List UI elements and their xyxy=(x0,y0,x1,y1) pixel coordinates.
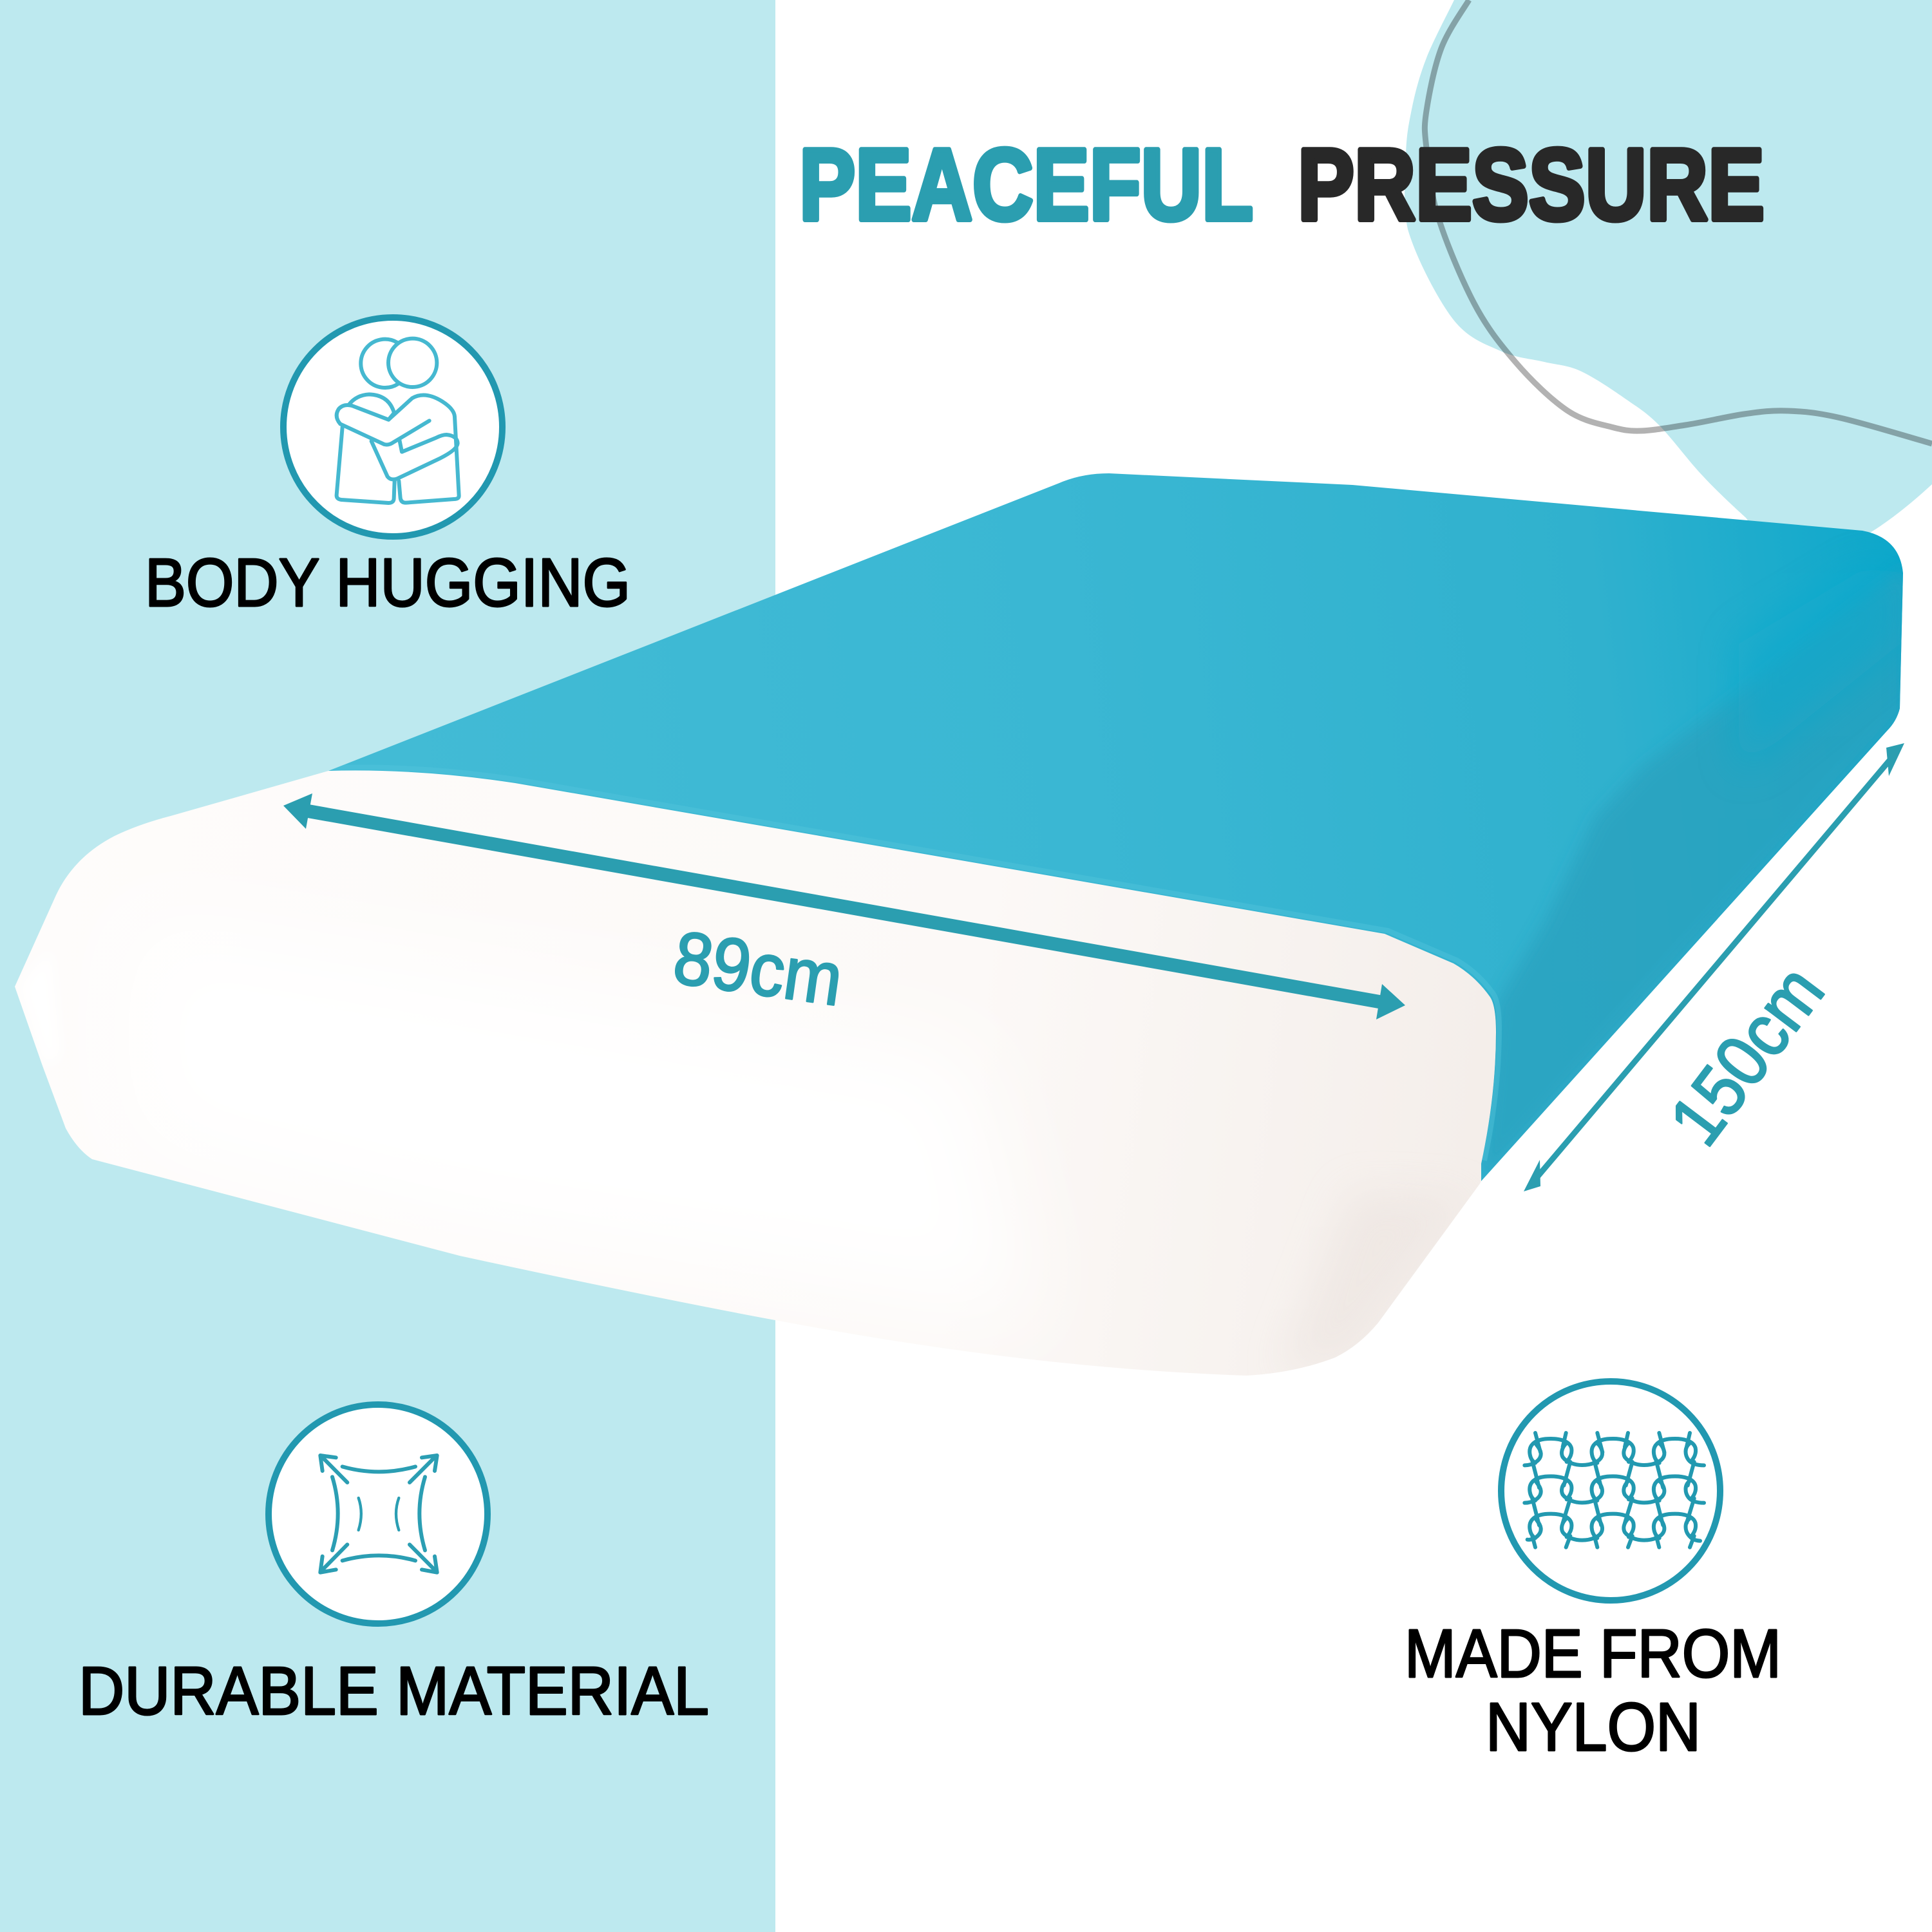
mattress teal fitted sheet xyxy=(328,473,1903,1181)
icon: knitted nylon mesh xyxy=(1524,1433,1704,1548)
title xyxy=(799,128,1765,242)
dimension label: 150cm: 150cm xyxy=(1654,951,1840,1160)
decorative grey curve xyxy=(1425,0,1932,444)
label: made from: MADE FROM xyxy=(1405,1616,1781,1692)
icon: four way stretch xyxy=(320,1455,437,1573)
arrow: length dimension xyxy=(1524,743,1904,1191)
feature: made from nylon xyxy=(1405,1381,1781,1765)
feature: durable material xyxy=(79,1405,709,1729)
icon circle: hugging xyxy=(283,317,502,536)
feature: body hugging xyxy=(145,317,630,621)
icon: two people hugging xyxy=(337,339,459,503)
title word: peaceful: PEACEFUL xyxy=(799,128,1253,242)
mattress xyxy=(0,451,1932,1417)
dimension label: 89cm: 89cm xyxy=(669,915,848,1021)
label: body hugging: BODY HUGGING xyxy=(145,545,630,621)
arrow: width dimension xyxy=(283,793,1405,1019)
decorative blob top right xyxy=(1405,0,1932,580)
icon circle: knit xyxy=(1501,1381,1720,1600)
left pale blue panel xyxy=(0,0,775,1932)
label: nylon: NYLON xyxy=(1486,1689,1701,1765)
mattress white sheet base xyxy=(15,770,1496,1376)
icon circle: stretch xyxy=(269,1405,488,1624)
title word: pressure: PRESSURE xyxy=(1298,128,1765,242)
label: durable material: DURABLE MATERIAL xyxy=(79,1653,709,1729)
